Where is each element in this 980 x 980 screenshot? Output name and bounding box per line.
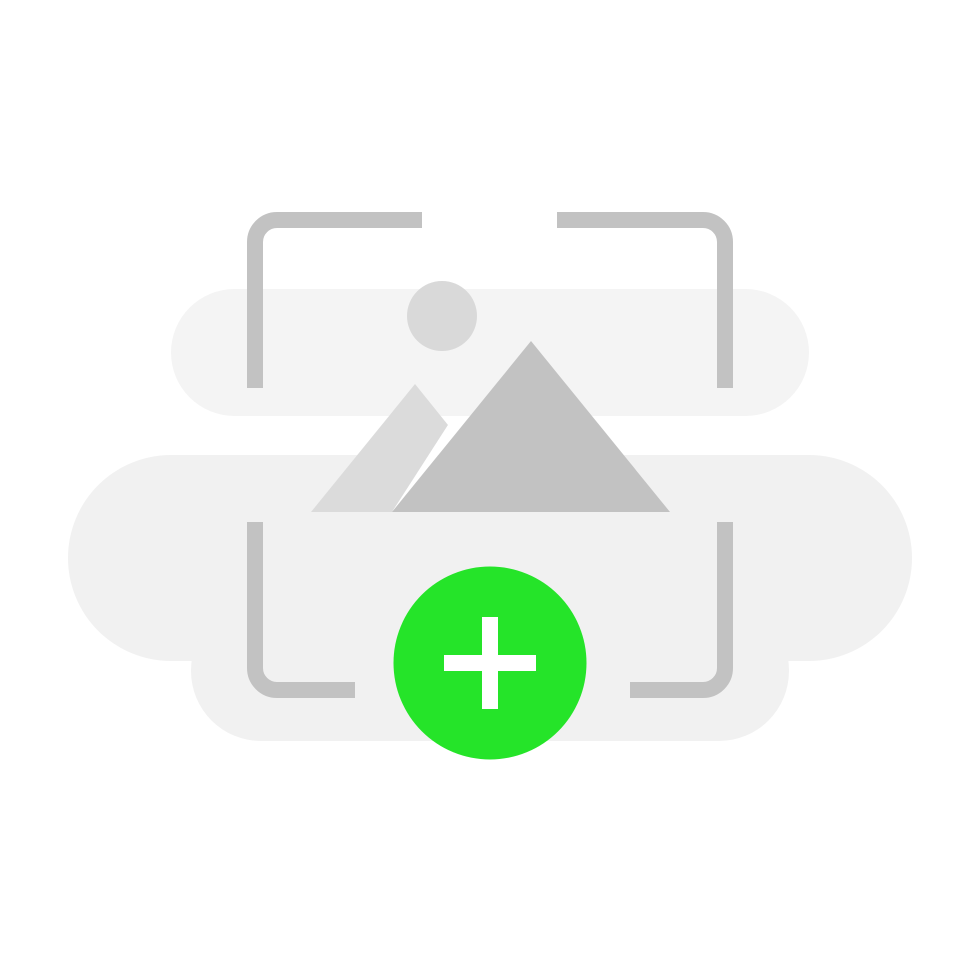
icon: large mountain: [392, 341, 670, 512]
white gap between mountains: [392, 417, 469, 512]
icon: small mountain: [311, 384, 448, 512]
icon: green add button: [394, 566, 586, 760]
background cloud: [68, 289, 912, 741]
icon: sun: [407, 281, 477, 351]
viewfinder frame corners: [255, 220, 725, 690]
icon: plus sign: [444, 617, 536, 709]
